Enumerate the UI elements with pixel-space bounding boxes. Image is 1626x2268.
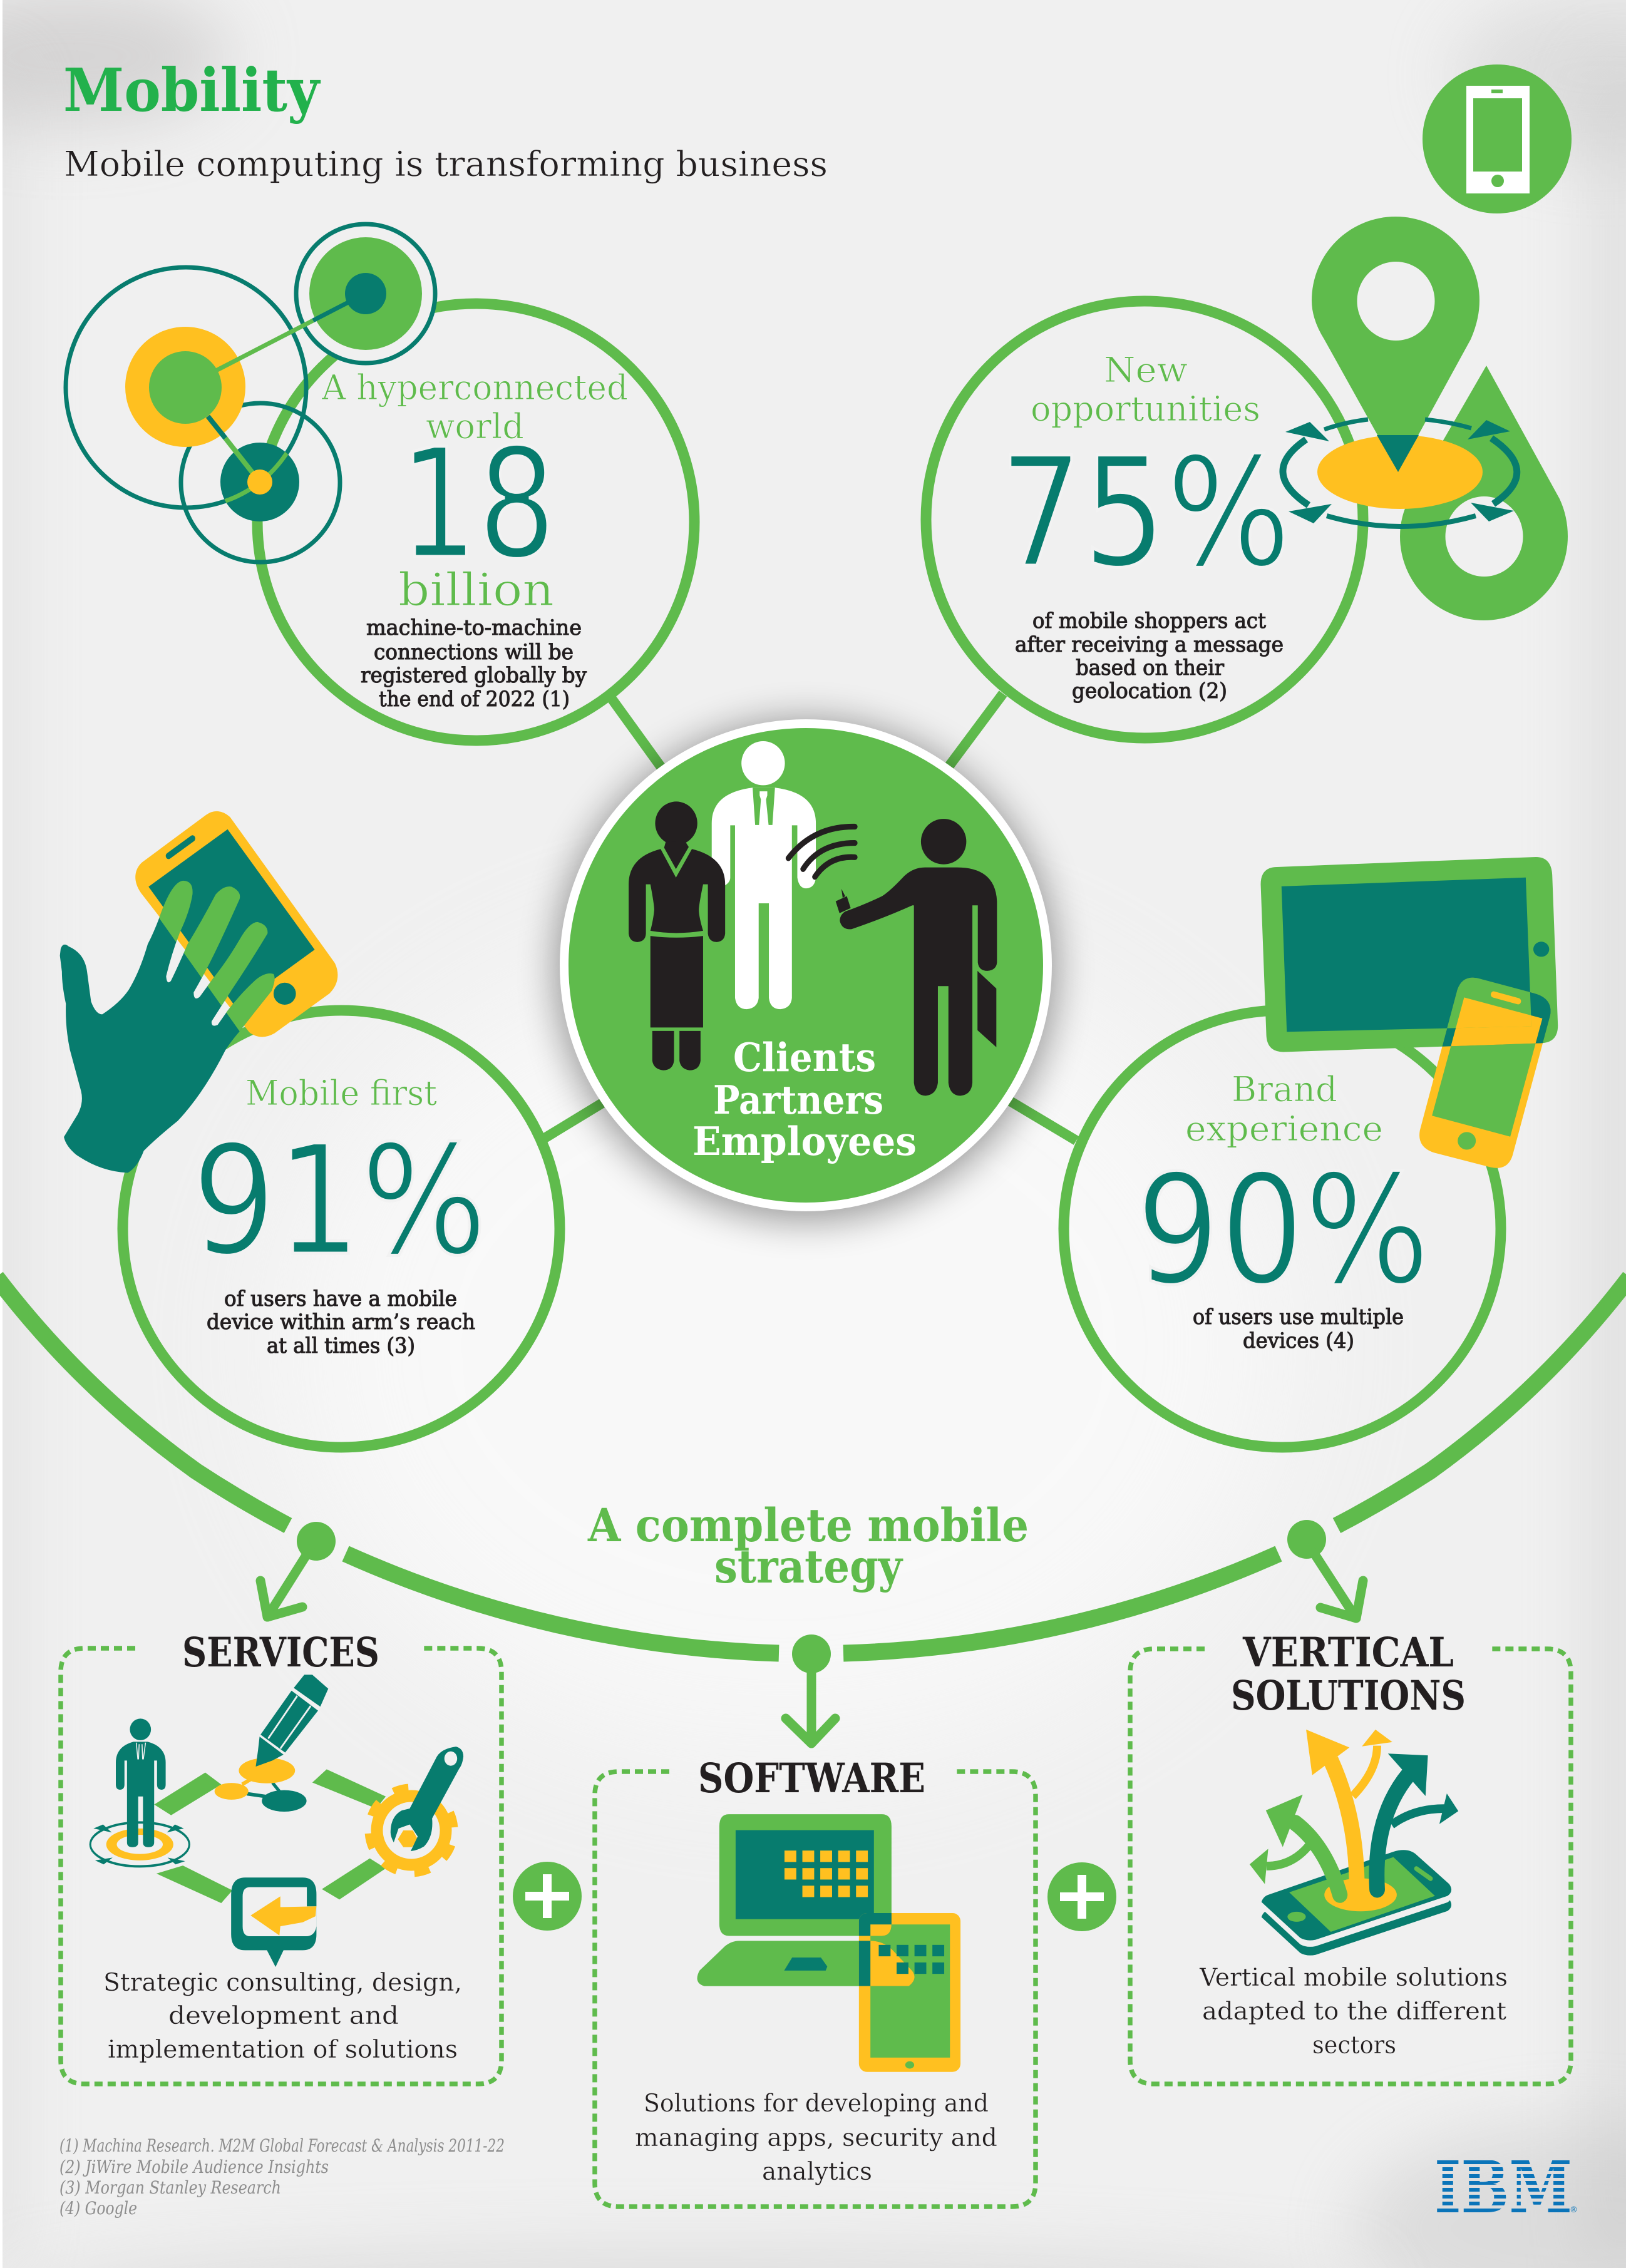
dashed frame bbox=[1130, 1649, 1571, 2084]
description: analytics bbox=[762, 2158, 872, 2186]
description: of users use multiple bbox=[1193, 1305, 1404, 1330]
hub disc bbox=[564, 724, 1047, 1207]
panel: center hub bbox=[564, 724, 1047, 1207]
tablet and phone icon bbox=[1261, 857, 1558, 1168]
dashed frame bbox=[61, 1648, 502, 2084]
description: Vertical mobile solutions bbox=[1199, 1964, 1508, 1992]
green arrows bbox=[1267, 1823, 1340, 1895]
footnotes: (2) JiWire Mobile Audience Insights bbox=[59, 2157, 329, 2177]
description: sectors bbox=[1312, 2031, 1396, 2060]
description: at all times (3) bbox=[267, 1333, 415, 1358]
circle outline bbox=[123, 1010, 560, 1447]
heading: opportunities bbox=[1031, 389, 1260, 429]
arrow: to software bbox=[786, 1634, 835, 1743]
number: 91% bbox=[192, 1113, 487, 1290]
footnotes: (4) Google bbox=[59, 2198, 137, 2219]
hub labels: Employees bbox=[692, 1118, 917, 1164]
hub labels: Clients bbox=[733, 1034, 876, 1080]
description: device within arm’s reach bbox=[207, 1310, 475, 1335]
center hub shadow bbox=[555, 720, 1056, 1221]
circle outline bbox=[926, 301, 1363, 738]
link segments bbox=[154, 1769, 386, 1903]
large strategy arc bbox=[0, 1277, 1626, 1653]
phone with arrows icon bbox=[1250, 1730, 1458, 1956]
description: connections will be bbox=[374, 640, 574, 665]
description: machine-to-machine bbox=[366, 615, 582, 640]
yellow arrows bbox=[1331, 1746, 1377, 1887]
heading: SOLUTIONS bbox=[1231, 1672, 1466, 1720]
description: registered globally by bbox=[361, 663, 587, 688]
description: of mobile shoppers act bbox=[1032, 608, 1266, 634]
strategy heading bbox=[587, 1499, 1029, 1594]
location pins icon bbox=[1283, 217, 1568, 620]
description: of users have a mobile bbox=[224, 1286, 457, 1311]
consultant figure on target bbox=[90, 1718, 189, 1866]
circle outline bbox=[1064, 1010, 1501, 1447]
panel: services bbox=[61, 1629, 502, 2084]
description: implementation of solutions bbox=[108, 2036, 458, 2064]
gear bbox=[358, 1777, 465, 1884]
heading: A hyperconnected bbox=[321, 367, 628, 408]
heading bbox=[1031, 350, 1260, 429]
subtitle: Mobile computing is transforming business bbox=[64, 144, 828, 184]
hand holding phone icon bbox=[60, 819, 331, 1173]
icon: plus between services and software bbox=[513, 1862, 582, 1931]
heading: VERTICAL bbox=[1242, 1629, 1454, 1676]
isometric phone bbox=[1262, 1850, 1451, 1956]
panel: software bbox=[595, 1755, 1036, 2207]
strategy heading: A complete mobile bbox=[587, 1499, 1029, 1552]
signal waves bbox=[788, 827, 855, 877]
laptop bbox=[697, 1814, 915, 1986]
services cycle icon bbox=[90, 1675, 386, 1967]
nut bbox=[398, 1830, 418, 1847]
description bbox=[1015, 608, 1284, 704]
description: the end of 2022 (1) bbox=[379, 687, 570, 712]
hub labels bbox=[692, 1034, 917, 1164]
network icon bbox=[66, 224, 435, 562]
title: Mobility bbox=[63, 56, 321, 125]
footnotes bbox=[59, 2135, 505, 2219]
panel: brand experience bbox=[1064, 857, 1558, 1447]
description: based on their bbox=[1076, 655, 1225, 680]
connector lines from center hub bbox=[545, 694, 1076, 1141]
hub labels: Partners bbox=[713, 1077, 883, 1123]
footnotes: (3) Morgan Stanley Research bbox=[59, 2177, 281, 2198]
number: 90% bbox=[1136, 1142, 1430, 1319]
arrow: to services bbox=[260, 1522, 336, 1617]
figure: woman bbox=[629, 801, 725, 1070]
heading: New bbox=[1104, 350, 1188, 390]
heading: Mobile first bbox=[245, 1073, 437, 1113]
arrow: to vertical solutions bbox=[1287, 1520, 1363, 1618]
heading bbox=[1185, 1069, 1383, 1149]
wrench bbox=[391, 1747, 463, 1851]
heading: experience bbox=[1185, 1109, 1383, 1149]
panel: mobile first bbox=[60, 819, 560, 1447]
heading bbox=[1231, 1629, 1466, 1720]
description: geolocation (2) bbox=[1072, 679, 1227, 704]
description bbox=[361, 615, 587, 712]
heading bbox=[321, 367, 628, 446]
description: adapted to the different bbox=[1202, 1998, 1506, 2026]
footnotes: (1) Machina Research. M2M Global Forecast & Analysis 2011-22 bbox=[59, 2135, 505, 2156]
unit: billion bbox=[398, 563, 554, 616]
description: Solutions for developing and bbox=[644, 2090, 989, 2118]
panel: new opportunities bbox=[926, 217, 1568, 738]
IBM logo: ® bbox=[1570, 2205, 1578, 2215]
people icon bbox=[629, 741, 997, 1096]
circle outline bbox=[257, 304, 694, 741]
heading: Brand bbox=[1232, 1069, 1337, 1109]
icon: phone badge bbox=[1423, 64, 1572, 213]
panel: hyperconnected world bbox=[66, 224, 694, 741]
number: 75% bbox=[999, 425, 1291, 602]
heading: world bbox=[426, 406, 524, 446]
description: devices (4) bbox=[1243, 1328, 1354, 1353]
heading: SERVICES bbox=[182, 1629, 379, 1676]
laptop and tablet icon bbox=[697, 1814, 960, 2072]
figure: man with device bbox=[836, 819, 997, 1096]
description bbox=[207, 1286, 475, 1358]
figure: partner in white bbox=[712, 741, 816, 1009]
panel: vertical solutions bbox=[1130, 1629, 1571, 2084]
strategy heading: strategy bbox=[714, 1540, 903, 1594]
description: managing apps, security and bbox=[635, 2124, 997, 2152]
heading: SOFTWARE bbox=[698, 1755, 925, 1802]
IBM logo: IBM bbox=[1434, 2145, 1572, 2229]
icon: plus between software and vertical solutions bbox=[1047, 1862, 1116, 1931]
description: development and bbox=[168, 2002, 399, 2030]
description: Strategic consulting, design, bbox=[103, 1969, 462, 1997]
pencil design icon bbox=[215, 1675, 328, 1812]
tablet bbox=[859, 1913, 960, 2072]
number: 18 bbox=[399, 416, 556, 593]
dashed frame bbox=[595, 1772, 1036, 2207]
teal arrows bbox=[1377, 1775, 1444, 1889]
description bbox=[635, 2090, 997, 2186]
description bbox=[103, 1969, 462, 2064]
description: after receiving a message bbox=[1015, 632, 1284, 657]
description bbox=[1193, 1305, 1404, 1353]
description bbox=[1199, 1964, 1508, 2060]
speech bubble arrow icon bbox=[231, 1877, 316, 1967]
